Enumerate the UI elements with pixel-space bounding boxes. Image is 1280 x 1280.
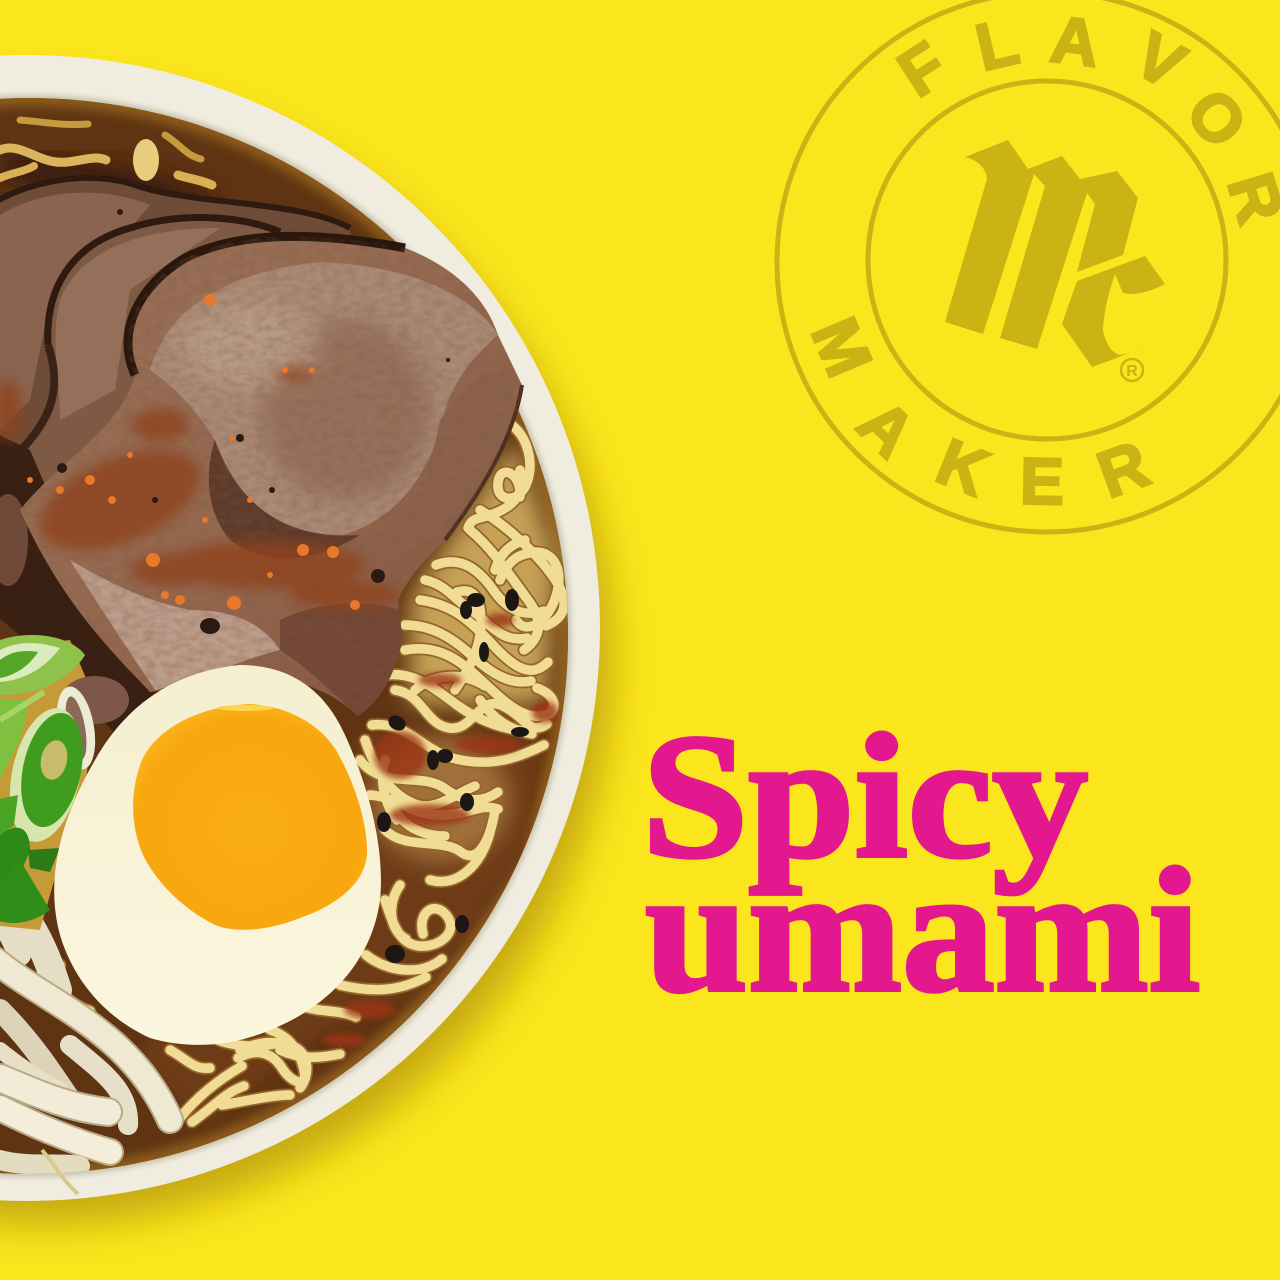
sprout tail over rim	[42, 1150, 78, 1194]
egg yolk	[133, 704, 367, 930]
soft egg	[54, 665, 381, 1045]
middle pork slice	[0, 217, 300, 540]
registered mark	[1121, 359, 1143, 381]
badge text: FLAVOR: F	[885, 27, 959, 111]
dark spice specks	[57, 209, 450, 634]
badge rings	[777, 0, 1280, 532]
bean sprouts	[0, 905, 170, 1166]
badge text: FLAVOR: V	[1123, 17, 1197, 103]
chili flakes	[27, 294, 360, 610]
bowl shadow	[0, 92, 612, 1224]
badge text: MAKER: E	[1019, 444, 1065, 518]
badge text: MAKER: A	[844, 385, 930, 471]
badge text: FLAVOR: L	[969, 3, 1025, 85]
meat surface	[150, 262, 498, 540]
fat edge	[70, 560, 280, 690]
ramen bowl	[0, 55, 612, 1224]
dark meat underside	[0, 430, 160, 740]
Mc monogram	[945, 140, 1165, 367]
egg white	[54, 665, 381, 1045]
chili powder on pork	[0, 368, 400, 609]
registered mark: R	[1126, 363, 1138, 380]
title	[642, 697, 1200, 1029]
badge text: FLAVOR: A	[1047, 1, 1103, 81]
top noodles	[0, 120, 212, 185]
badge text: FLAVOR: O	[1172, 75, 1262, 161]
meat grain	[24, 236, 522, 688]
bowl rim	[0, 55, 600, 1201]
badge text: MAKER: K	[927, 424, 999, 510]
small meat piece	[61, 676, 129, 724]
badge text: MAKER: M	[797, 307, 887, 387]
badge text: MAKER: R	[1088, 426, 1158, 512]
noodle pile	[58, 425, 564, 1125]
title: Spicy	[642, 697, 1088, 895]
logo: Flavor Maker badge	[777, 0, 1280, 532]
front pork slice	[0, 220, 530, 720]
badge text: FLAVOR	[885, 1, 1280, 232]
badge text: MAKER	[797, 307, 1158, 518]
chili flakes on noodles	[322, 613, 558, 1047]
title: umami	[645, 831, 1200, 1029]
scallions	[0, 635, 129, 930]
sesame seeds	[377, 589, 529, 963]
back pork slice	[0, 178, 360, 540]
broth and noodles, clipped to bowl interior	[0, 98, 568, 1174]
broth	[0, 98, 568, 1174]
